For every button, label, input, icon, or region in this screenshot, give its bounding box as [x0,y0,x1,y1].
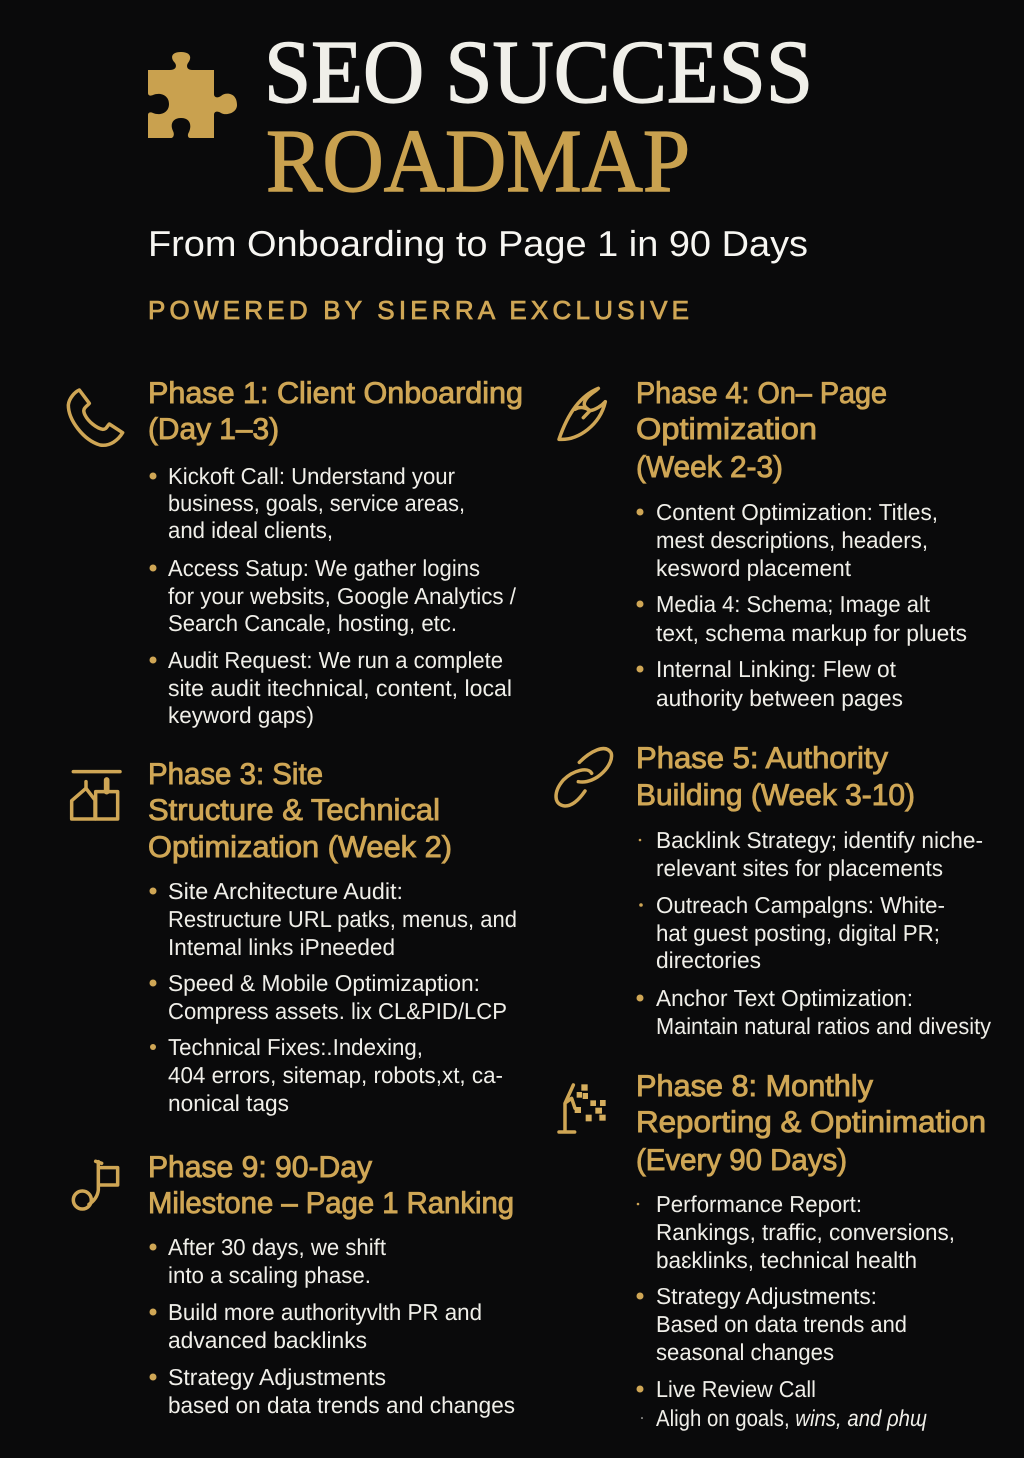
bullet list: authority between pages [656,685,903,711]
bullet list: and ideal clients, [168,517,333,543]
heading: Phase 1: Client Onboarding [148,377,523,410]
bullet list: Maintain natural ratios and divesity [656,1013,991,1039]
bullet list [636,499,967,711]
panel: phase 8 [559,1070,986,1431]
bullet list: Access Satup: We gather logins [168,555,480,581]
subtitle: From Onboarding to Page 1 in 90 Days [148,223,808,264]
heading: Building (Week 3-10) [636,779,915,812]
bullet list: Strategy Adjustments [168,1364,386,1390]
bullet list: into a scaling phase. [168,1262,371,1288]
panel: phase 3 [72,758,517,1116]
bullet list: Strategy Adjustments: [656,1283,877,1309]
heading: Phase 9: 90-Day [148,1151,372,1184]
bullet list: Anchor Text Optimization: [656,985,913,1011]
title: SEO Success: SEO SUCCESS [264,23,813,122]
panel: phase 9 [73,1151,515,1418]
bullet list: hat guest posting, digital PR; [656,920,940,946]
tagline: POWERED BY SIERRA EXCLUSIVE [148,295,689,325]
bullet list [150,1234,515,1418]
bullet list: Technical Fixes:.Indexing, [168,1034,423,1060]
bullet list: keyword gaps) [168,702,314,728]
bullet list [150,463,517,728]
bullet list: Performance Report: [656,1191,862,1217]
bullet list: nonical tags [168,1090,289,1116]
heading [636,1070,986,1177]
panel: phase 1 [68,377,523,728]
bullet list: seasonal changes [656,1339,834,1365]
icon: phone [68,390,123,445]
bullet list [636,827,991,1039]
bullet list: advanced backlinks [168,1327,367,1353]
bullet list: directories [656,947,761,973]
heading: Structure & Technical [148,794,440,827]
bullet list: business, goals, service areas, [168,490,465,516]
heading: Reporting & Optinimation [636,1106,986,1139]
header [148,23,813,325]
bullet list: 404 errors, sitemap, robots,xt, ca- [168,1062,503,1088]
heading: (Day 1–3) [148,413,279,446]
heading: Phase 5: Authority [636,742,888,775]
icon: music note flag [73,1161,118,1209]
bullet list: Kickoft Call: Understand your [168,463,455,489]
bullet list: Based on data trends and [656,1311,907,1337]
bullet list: kesword placement [656,555,852,581]
title: Roadmap: ROADMAP [266,112,690,211]
icon: puzzle piece [148,52,237,138]
bullet list: based on data trends and changes [168,1392,515,1418]
panel: phase 4 [559,377,967,711]
panel: phase 5 [556,742,991,1039]
bullet list: Media 4: Schema; Image alt [656,591,931,617]
bullet list: Internal Linking: Flew ot [656,656,897,682]
bullet list: baɛklinks, technical health [656,1247,917,1273]
heading: Optimization [636,413,817,446]
bullet list: Build more authorityvlth PR and [168,1299,482,1325]
bullet list: mest descriptions, headers, [656,527,928,553]
bullet list: Compress assets. lix CL&PID/LCP [168,998,507,1024]
bullet list: Rankings, traffic, conversions, [656,1219,955,1245]
bullet list: Aligh on goals, wins, and ρhɰ [656,1405,927,1431]
heading [148,1151,514,1220]
heading: (Every 90 Days) [636,1144,847,1177]
bullet list: for your websits, Google Analytics / [168,583,517,609]
bullet list: Content Optimization: Titles, [656,499,938,525]
bullet list [636,1191,955,1431]
bullet list: site audit itechnical, content, local [168,675,512,701]
heading: Optimization (Week 2) [148,831,452,864]
bullet list: Intemal links iPneeded [168,934,395,960]
bullet list: Site Architecture Audit: [168,878,403,904]
bullet list: Restructure URL patks, menus, and [168,906,517,932]
bullet list: relevant sites for placements [656,855,943,881]
bullet list: After 30 days, we shift [168,1234,387,1260]
heading: (Week 2-3) [636,451,783,484]
heading [636,742,915,812]
heading [148,377,523,446]
heading: Phase 4: On– Page [636,377,887,410]
bullet list: Search Cancale, hosting, etc. [168,610,457,636]
icon: pen nib [559,388,605,439]
bullet list [150,878,517,1116]
icon: chain link [556,749,612,806]
heading: Phase 3: Site [148,758,323,791]
bullet list: Speed & Mobile Optimizaption: [168,970,480,996]
bullet list: Audit Request: We run a complete [168,647,503,673]
heading: Phase 8: Monthly [636,1070,873,1103]
heading [148,758,452,864]
bullet list: Backlink Strategy; identify niche- [656,827,983,853]
bullet list: text, schema markup for pluets [656,620,967,646]
heading: Milestone – Page 1 Ranking [148,1187,514,1220]
icon: buildings [72,772,120,819]
bullet list: Outreach Campalgns: White- [656,892,945,918]
bullet list: Live Review Call [656,1376,816,1402]
icon: checkered flag [559,1084,606,1132]
heading [636,377,887,484]
